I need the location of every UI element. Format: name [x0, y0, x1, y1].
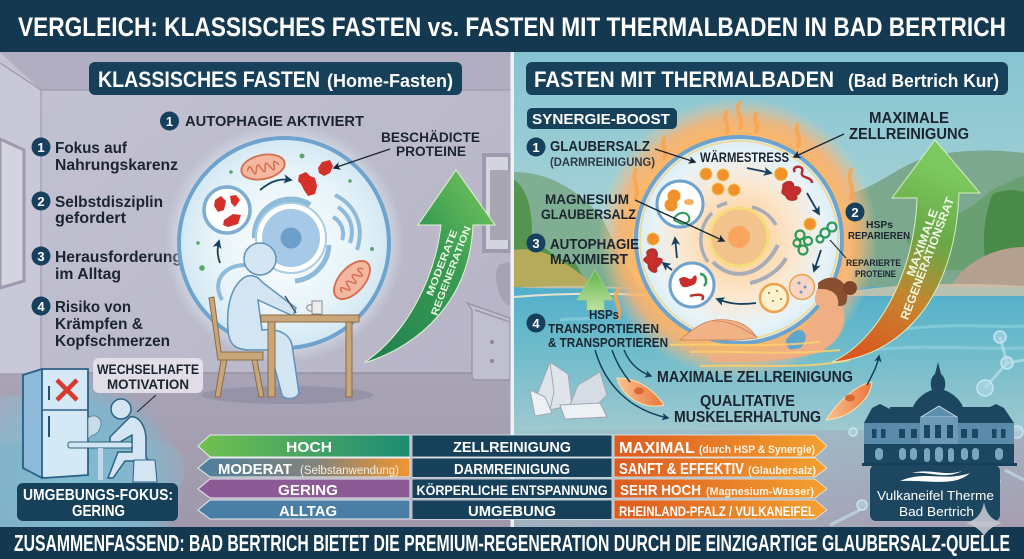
comparison table: right column: RHEINLAND-PFALZ / VULKANEIFEL [619, 503, 815, 519]
step 1: Glaubersalz: GLAUBERSALZ [550, 138, 650, 155]
callout: wechselhafte Motivation: WECHSELHAFTE [97, 362, 199, 377]
comparison table: left column: ALLTAG [279, 503, 337, 520]
label: Autophagie aktiviert: 1 [166, 114, 173, 129]
damaged proteins [298, 160, 333, 196]
comparison table: right column [614, 435, 827, 519]
heading: Klassisches Fasten: (Home-Fasten) [327, 71, 453, 91]
comparison table: right column: (Glaubersalz) [748, 465, 816, 477]
step 1: Glaubersalz [526, 138, 695, 169]
arrow: maximale Regenerationsrat [832, 140, 980, 362]
arrow: maximale Regenerationsrat: MAXIMALE [904, 207, 941, 278]
label: Beschädigte Proteine: BESCHÄDICTE [381, 130, 480, 145]
left list: numbered drawbacks: Fokus auf [55, 140, 128, 157]
label: qualitative Muskelerhaltung: QUALITATIVE [700, 393, 795, 410]
arrow: moderate regeneration [365, 170, 495, 362]
heading: Fasten mit Thermalbaden [526, 62, 1008, 95]
autophagosome with damaged proteins [204, 187, 250, 233]
label: Autophagie aktiviert: AUTOPHAGIE AKTIVIERT [185, 113, 364, 130]
step 2: HSPs reparieren [846, 202, 910, 242]
label: qualitative Muskelerhaltung [674, 393, 821, 426]
chair [209, 297, 264, 397]
left list: numbered drawbacks: Krämpfen & [55, 316, 143, 333]
heading: Klassisches Fasten: KLASSISCHES FASTEN [98, 67, 320, 92]
step 1: Glaubersalz: (DARMREINIGUNG) [550, 155, 655, 169]
left list: numbered drawbacks: Herausforderung [55, 249, 182, 266]
label: reparierte Proteine [830, 240, 901, 280]
nucleus [701, 203, 786, 283]
panel: Bad Bertrich landscape background [514, 52, 1024, 528]
comparison table: right column: SEHR HOCH [620, 482, 701, 499]
lysosomes near woman [760, 274, 814, 312]
cell diagram: thermal autophagy cycle [636, 137, 842, 343]
label: Magnesium Glaubersalz: MAGNESIUM [545, 191, 629, 207]
comparison table: center column: KÖRPERLICHE ENTSPANNUNG [416, 482, 608, 498]
cycle arrows [663, 168, 821, 304]
heading: Fasten mit Thermalbaden: FASTEN MIT THERMALBADEN [534, 67, 834, 92]
left list: numbered drawbacks: 1 [37, 140, 45, 155]
label box: Umgebungs-Fokus [17, 483, 178, 521]
left list: numbered drawbacks: Selbstdisziplin [55, 194, 163, 211]
body [228, 276, 299, 399]
vesicle bottom left [670, 263, 714, 307]
arrow: maximale Regenerationsrat: REGENERATIONSRAT [897, 195, 957, 322]
comparison table: center column: UMGEBUNG [468, 503, 556, 520]
step 4: HSPs transportieren [526, 308, 668, 350]
comparison table: left column: HOCH [286, 439, 332, 456]
step 2: HSPs reparieren: HSPs [866, 219, 893, 231]
step 3: Autophagie maximiert [526, 234, 639, 268]
step 3: Autophagie maximiert: MAXIMIERT [550, 251, 628, 268]
arrow: moderate regeneration: MODERATE [425, 228, 460, 298]
pathway arrows [260, 179, 291, 190]
label: Maximale Zellreinigung top: MAXIMALE [869, 110, 949, 127]
organelle dots [196, 154, 374, 271]
step 2: HSPs reparieren: 2 [851, 205, 859, 220]
cup [307, 301, 322, 314]
callout: wechselhafte Motivation [93, 358, 203, 412]
label: Maximale Zellreinigung top: ZELLREINIGUNG [849, 126, 969, 143]
comparison table: left column: GERING [278, 482, 338, 499]
icon: muscle cell left [617, 378, 664, 406]
sparkle [966, 502, 1002, 536]
left list: numbered drawbacks: Nahrungskarenz [55, 157, 178, 174]
repaired proteins [794, 222, 836, 254]
mitochondrion upper [239, 151, 287, 183]
cell diagram: classic autophagy [164, 123, 404, 363]
left list: numbered drawbacks: im Alltag [55, 266, 121, 283]
comparison table: left column: (Selbstanwendung) [300, 465, 399, 477]
left list: numbered drawbacks: 4 [37, 299, 45, 314]
label: Beschädigte Proteine [334, 130, 480, 168]
thermal flames and glow [598, 98, 878, 378]
panel divider [510, 52, 514, 528]
icon: glaubersalz crystals [530, 362, 607, 419]
step 4: HSPs transportieren: TRANSPORTIEREN [548, 322, 659, 336]
mitochondrion lower [327, 255, 377, 305]
building: Vulkaneifel Therme [862, 362, 1017, 521]
pen [285, 296, 296, 313]
icon: muscle cell right [826, 382, 872, 420]
illustration: woman bathing [670, 278, 857, 366]
comparison table: right column: SANFT & EFFEKTIV [619, 461, 744, 478]
comparison table: center column: ZELLREINIGUNG [453, 439, 571, 456]
step 4: HSPs transportieren: HSPs [589, 308, 619, 322]
icon: person at table [209, 243, 359, 399]
label: Maximale Zellreinigung: MAXIMALE ZELLREINIGUNG [657, 369, 853, 386]
label: reparierte Proteine: PROTEINE [855, 269, 896, 280]
left list: numbered drawbacks: Risiko von [55, 299, 131, 316]
label: qualitative Muskelerhaltung: MUSKELERHALTUNG [674, 409, 821, 426]
nucleus [255, 200, 329, 281]
comparison table: right column: MAXIMAL [619, 440, 695, 457]
heading: Fasten mit Thermalbaden: (Bad Bertrich Kur) [848, 71, 999, 91]
icon: small person at table [68, 399, 157, 482]
label: Maximale Zellreinigung top [794, 110, 969, 157]
comparison table: left column [198, 435, 410, 520]
label: reparierte Proteine: REPARIERTE [846, 258, 901, 269]
label: Magnesium Glaubersalz [541, 191, 724, 241]
heading: Klassisches Fasten [89, 62, 462, 95]
label box: Umgebungs-Fokus: UMGEBUNGS-FOKUS: [23, 487, 173, 504]
lysosome arc near person [218, 265, 258, 300]
left list: numbered drawbacks: 2 [37, 194, 45, 209]
comparison table: right column: (durch HSP & Synergie) [699, 444, 815, 456]
Golgi [333, 195, 360, 250]
left list: numbered drawbacks: 3 [37, 249, 45, 264]
therme label box: Bad Bertrich [899, 504, 974, 519]
synergie badge: SYNERGIE-BOOST [532, 111, 670, 128]
left list: numbered drawbacks [32, 138, 182, 350]
floor shadow [201, 386, 373, 404]
misfolded proteins [644, 167, 812, 272]
therme label box: Vulkaneifel Therme [877, 488, 994, 503]
step 3: Autophagie maximiert: 3 [532, 236, 540, 251]
label: Wärmestress: WÄRMESTRESS [700, 149, 789, 165]
label: Magnesium Glaubersalz: GLAUBERSALZ [541, 206, 636, 222]
small green arrow up [577, 270, 613, 310]
step 4: HSPs transportieren: 4 [532, 316, 540, 331]
callout: wechselhafte Motivation: MOTIVATION [107, 377, 189, 392]
heat shock proteins [647, 168, 816, 245]
comparison table: center column: DARMREINIGUNG [454, 461, 570, 478]
flow arrows from HSP transport [595, 350, 879, 418]
label box: Umgebungs-Fokus: GERING [72, 503, 125, 520]
comparison table: center column [412, 435, 612, 520]
left list: numbered drawbacks: Kopfschmerzen [55, 333, 170, 350]
bottom-left blue globe glow [0, 376, 185, 528]
step 1: Glaubersalz: 1 [532, 140, 540, 155]
title bar [0, 0, 1024, 52]
panel: Klassisches Fasten background room [0, 52, 511, 528]
step 3: Autophagie maximiert: AUTOPHAGIE [550, 236, 639, 253]
vesicle top left [657, 181, 703, 227]
molecule network decoration [830, 331, 1024, 525]
left list: numbered drawbacks: gefordert [55, 210, 127, 227]
step 2: HSPs reparieren: REPARIEREN [848, 230, 910, 242]
comparison table: right column: (Magnesium-Wasser) [706, 486, 814, 498]
icon: fridge with red cross [23, 369, 101, 478]
arrow: moderate regeneration: REGENERATION [430, 225, 474, 317]
comparison table: left column: MODERAT [218, 461, 292, 478]
table [261, 315, 359, 397]
head [244, 243, 276, 275]
label: Beschädigte Proteine: PROTEINE [396, 144, 466, 159]
therme label box [870, 465, 1000, 521]
step 4: HSPs transportieren: & TRANSPORTIEREN [548, 336, 668, 350]
